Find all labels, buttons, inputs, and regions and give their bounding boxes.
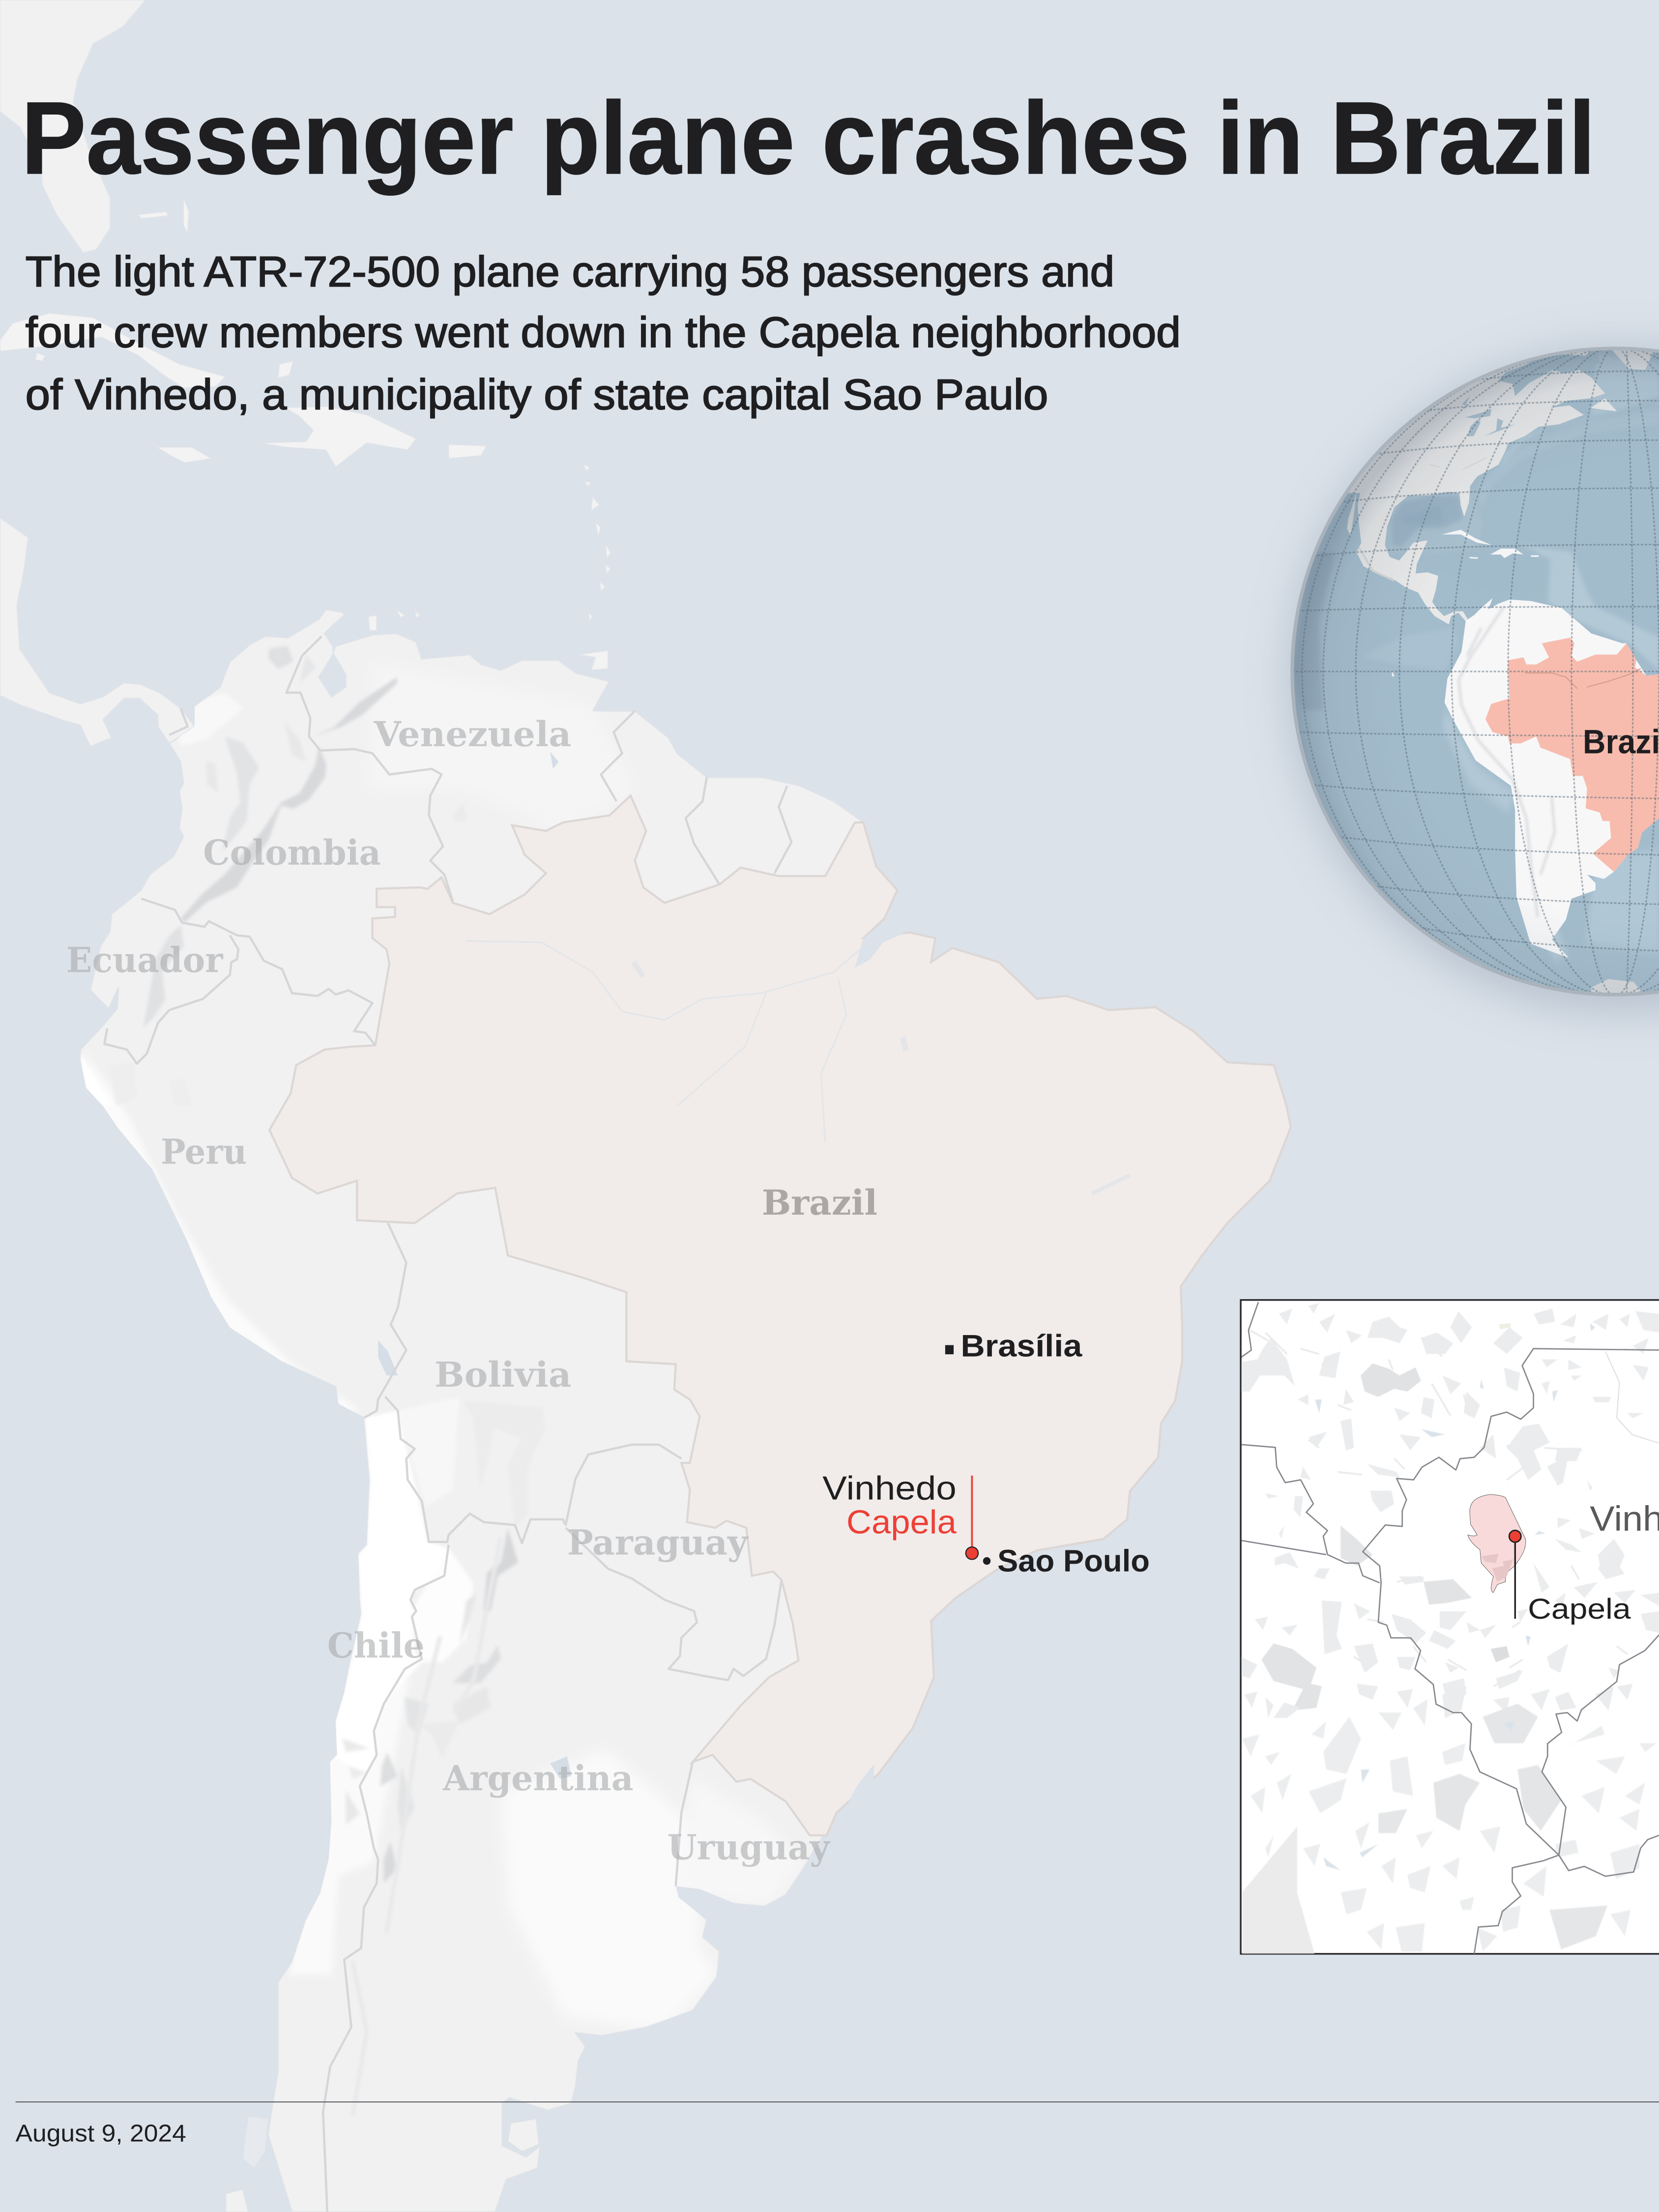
country borders [104,636,791,2212]
label: Uruguay: Uruguay [667,1827,831,1868]
city marker: Brasília: Brasília [960,1329,1082,1363]
title: Passenger plane crashes in Brazil [21,81,1596,196]
footer date: August 9, 2024 [16,2121,186,2147]
label: Brazil: Brazil [762,1182,877,1223]
inset pin: Capela [1509,1530,1631,1625]
globe: ocean depth [1293,353,1659,710]
subtitle text block: four crew members went down in the Capela neighborhood [26,308,1181,356]
globe: North America [1311,332,1659,676]
land: North America and Florida [0,0,146,253]
footer rule [16,2101,1659,2102]
callout: Vinhedo and Capela [822,1470,978,1559]
globe: shading [1291,347,1659,996]
globe: graticule [1292,347,1659,996]
callout: Vinhedo and Capela: Vinhedo [822,1470,957,1507]
label: Paraguay: Paraguay [567,1522,749,1563]
globe: Brazil [1485,638,1659,872]
inset: municipal borders [1242,1302,1659,1954]
land: Caribbean islands [0,198,611,670]
southern fjord islands [226,2116,539,2212]
label: Argentina: Argentina [442,1758,634,1799]
inset map: Vinhedo [1241,1300,1659,1954]
terrain: Andes streaks [432,1567,497,1681]
inset pin: Capela: Capela [1528,1593,1631,1625]
label: Chile: Chile [327,1625,425,1666]
inset: built-up patches, lower area [1242,1699,1657,1954]
globe: South America [1445,598,1659,958]
map: South America [0,0,1291,2212]
city marker: Sao Paulo: Sao Poulo [997,1544,1150,1578]
inset: faint ring road [1605,1351,1659,1443]
globe: Andes relief [1458,607,1555,917]
callout: Vinhedo and Capela: Capela [846,1504,957,1541]
globe: Antarctica [1591,979,1645,999]
terrain: northern Andes [81,646,398,1104]
subtitle text block: of Vinhedo, a municipality of state capital Sao Paulo [26,370,1048,418]
subtitle text block: The light ATR-72-500 plane carrying 58 passengers and [26,248,1114,296]
country: Brazil [269,796,1291,1835]
terrain: central Andes [336,1412,518,1882]
globe locator [1291,332,1659,1010]
label: Peru: Peru [161,1132,247,1172]
land: South America [81,610,1291,2212]
inset: Capela area [1468,1495,1526,1593]
label: Colombia: Colombia [203,832,381,873]
terrain shading [81,646,804,2116]
label: Bolivia: Bolivia [435,1354,571,1395]
label: Venezuela: Venezuela [374,714,571,755]
country labels [66,714,877,1868]
land: Mexico and Central America [0,518,195,746]
rivers and lakes [466,939,1130,1193]
subtitle text block [26,248,1181,418]
label: Ecuador: Ecuador [66,939,223,980]
inset: built-up patches, upper area [1241,1303,1659,1718]
